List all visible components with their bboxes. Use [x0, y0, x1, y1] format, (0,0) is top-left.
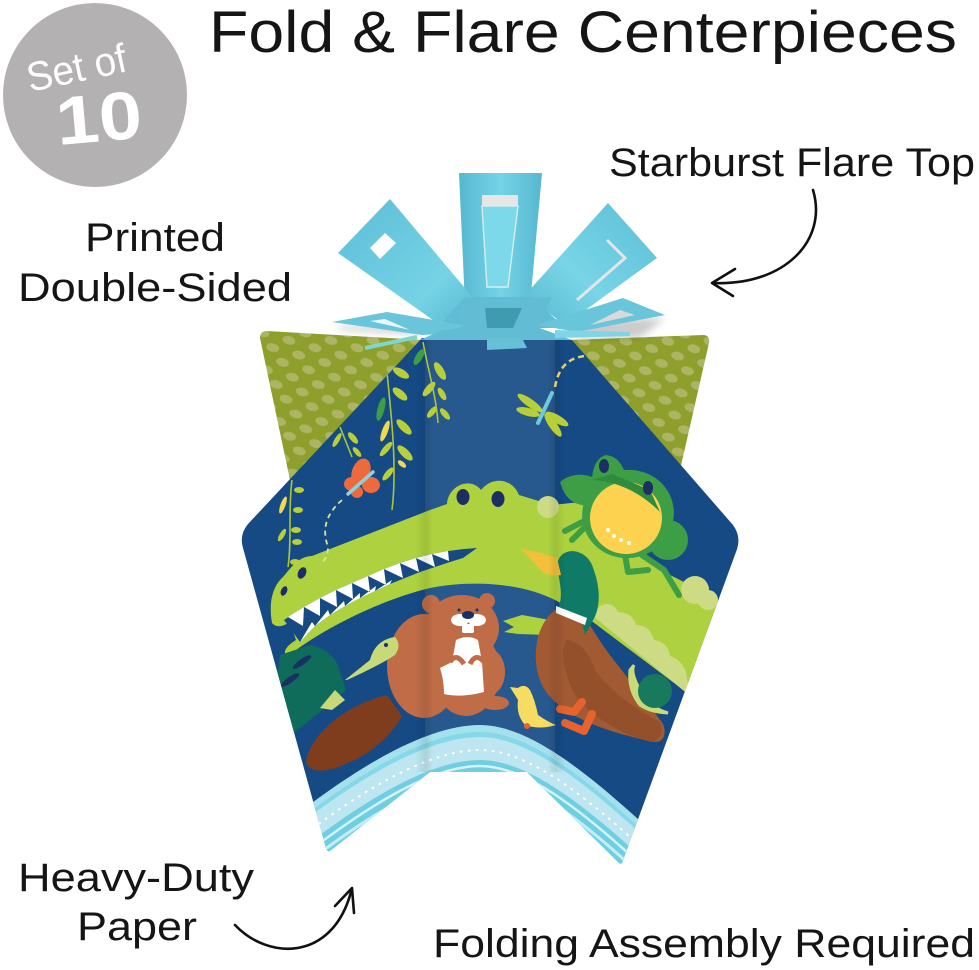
butterfly: [320, 456, 380, 564]
frog: [560, 455, 688, 595]
beaver tail: [306, 695, 402, 771]
title: Fold & Flare Centerpieces: [209, 0, 957, 65]
beaver face: [451, 608, 486, 633]
centerpiece front panel: [242, 335, 738, 900]
flare center front: [420, 297, 572, 340]
beak: [521, 549, 561, 576]
arrow: to starburst flare: [712, 190, 816, 296]
eyes: [279, 489, 504, 597]
beaver: [306, 593, 509, 771]
flare center arm: [459, 173, 542, 305]
beaver belly: [440, 637, 484, 696]
duck feet: [560, 702, 592, 731]
duck: [521, 549, 665, 742]
hand: [503, 615, 550, 635]
water stripes: [313, 725, 638, 864]
flare low left wing: [332, 312, 465, 335]
flare low right wing: [537, 298, 665, 332]
bushes: [537, 496, 718, 610]
badge: set of 10: [3, 3, 187, 187]
teeth: [288, 551, 449, 642]
duckling: [510, 686, 556, 729]
center panel shade: [425, 335, 555, 780]
snail: [630, 665, 672, 713]
label: starburst flare top: Starburst Flare Top: [609, 141, 975, 185]
label: printed double-sided: [18, 216, 292, 310]
crocodile: [271, 481, 725, 696]
fold shading: [415, 335, 566, 772]
flare hub: [437, 297, 565, 328]
turtle: [270, 637, 398, 732]
flare right arm: [525, 203, 657, 325]
arrow: to paper: [235, 888, 354, 949]
label: printed double-sided: Double-Sided: [18, 266, 292, 310]
label: heavy-duty paper: Paper: [77, 905, 197, 949]
soft shadow: [340, 318, 665, 338]
label: folding assembly required: Folding Assembly Required: [433, 922, 975, 966]
badge: set of 10: 10: [53, 77, 145, 160]
flare windows: [370, 195, 625, 300]
flare tab: [487, 338, 527, 350]
hanging vines: [276, 342, 452, 567]
flare left arm: [338, 199, 475, 325]
label: heavy-duty paper: Heavy-Duty: [18, 856, 254, 900]
panel: green polka-dot back right: [570, 335, 709, 470]
starburst flare top: [332, 173, 665, 350]
mouth: [284, 548, 477, 642]
label: printed double-sided: Printed: [85, 216, 225, 260]
badge: set of 10: Set of: [22, 35, 131, 101]
dragonfly: [515, 356, 585, 439]
label: heavy-duty paper: [18, 856, 254, 949]
panel: green polka-dot back left: [260, 331, 424, 480]
